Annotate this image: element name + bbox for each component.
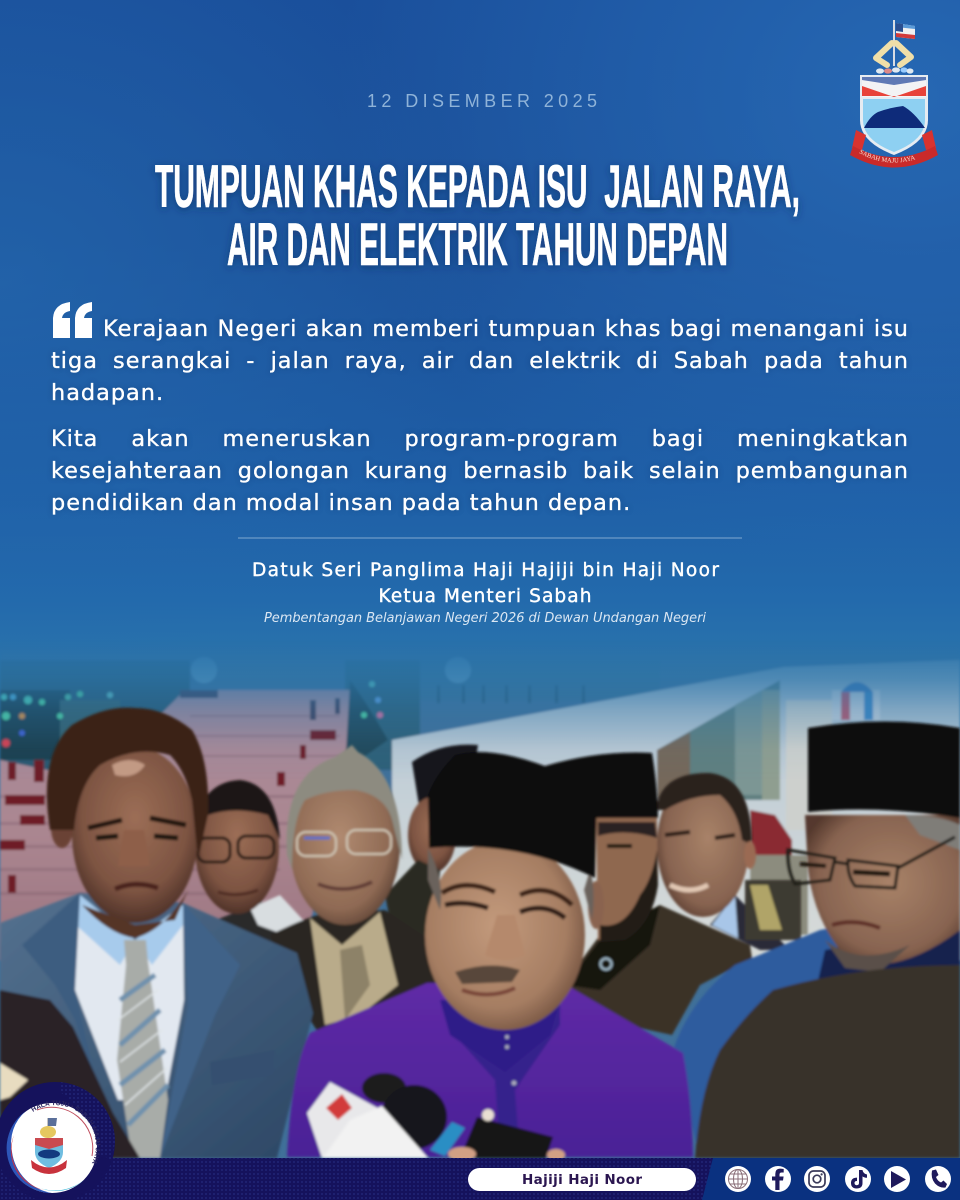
quote text block: Kita akan meneruskan program-program bagi meningkatkan — [51, 426, 909, 452]
name pill — [468, 1168, 696, 1191]
quote text block: kesejahteraan golongan kurang bernasib baik selain pembangunan — [51, 458, 909, 484]
emblem: flag on pole — [893, 20, 915, 66]
person: foreground dark shoulder, left — [0, 990, 140, 1158]
person: far back songkok man — [385, 745, 478, 960]
person: man in dark glasses, behind left — [190, 780, 310, 970]
person: central speaker in purple baju with black songkok — [287, 752, 693, 1157]
campaign badge: Hala Tuju Sabah Maju Jaya — [0, 1082, 115, 1199]
emblem: red motto ribbon — [850, 130, 938, 168]
footer bar: dotted navy band — [0, 1158, 960, 1200]
footer bar: blue social panel — [702, 1158, 960, 1200]
icon: instagram — [804, 1166, 830, 1192]
icon: facebook — [765, 1166, 791, 1192]
speaker attribution: Pembentangan Belanjawan Negeri 2026 di Dewan Undangan Negeri — [264, 611, 706, 626]
divider — [238, 538, 742, 539]
campaign badge: Hala Tuju Sabah Maju Jaya: HALA TUJU • SABAH MAJU JAYA — [31, 1100, 100, 1164]
speaker attribution: Datuk Seri Panglima Haji Hajiji bin Haji Noor — [252, 560, 719, 581]
date: 12 DISEMBER 2025 — [367, 91, 597, 111]
speaker attribution: Ketua Menteri Sabah — [378, 586, 592, 607]
person: grey haired man with lanyard — [270, 745, 440, 1050]
name pill: Hajiji Haji Noor — [522, 1172, 642, 1188]
photo: people in the group — [0, 708, 960, 1161]
speaker attribution — [252, 560, 719, 626]
person: dark haired man, right of centre — [656, 773, 801, 950]
emblem: red motto ribbon: SABAH MAJU JAYA — [860, 150, 916, 163]
photo: hall backdrop behind the group — [0, 640, 960, 1160]
icon: quotation mark — [53, 302, 92, 338]
quote text block: pendidikan dan modal insan pada tahun depan. — [51, 490, 631, 516]
icon: tiktok — [845, 1166, 871, 1192]
person: right man with songkok and glasses, blue baju — [673, 722, 960, 1158]
emblem: Sabah coat of arms — [850, 20, 938, 168]
quote text block: tiga serangkai - jalan raya, air dan elektrik di Sabah pada tahun — [51, 348, 909, 374]
icon: website globe — [725, 1166, 751, 1192]
quote text block: hadapan. — [51, 380, 164, 406]
emblem: arms holding pole — [876, 43, 911, 65]
icon: youtube play — [884, 1166, 910, 1192]
person: black songkok man with beard, behind right of centre — [545, 753, 752, 1035]
emblem: wreath — [876, 67, 914, 74]
person: foreground blurred shoulder, bottom right — [695, 965, 960, 1158]
emblem: shield — [860, 75, 928, 155]
quote text block: Kerajaan Negeri akan memberi tumpuan khas bagi menangani isu — [103, 316, 909, 342]
title — [155, 153, 800, 278]
quote text block — [51, 316, 909, 516]
person: left man in blue suit — [0, 708, 313, 1158]
microphones and phone — [307, 1073, 565, 1161]
foreground cream object, left — [0, 1063, 28, 1100]
icon: phone — [925, 1166, 951, 1192]
social icons — [725, 1166, 951, 1192]
